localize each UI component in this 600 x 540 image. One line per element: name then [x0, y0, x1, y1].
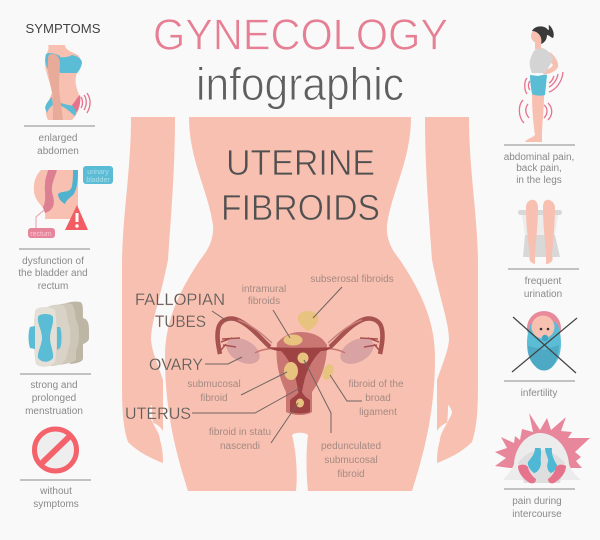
icon: prohibition sign	[34, 429, 76, 471]
label: dysfunction: rectum	[38, 281, 68, 292]
label: without symptoms: without	[39, 486, 72, 497]
subtitle: infographic: infographic	[196, 58, 404, 110]
icon: pain during intercourse	[495, 413, 590, 483]
label: without symptoms	[20, 480, 91, 510]
fibroid labels: submucosal	[187, 379, 241, 390]
label: dysfunction: the bladder and	[18, 268, 88, 279]
label: pain during intercourse	[504, 489, 575, 520]
anatomy labels: FALLOPIAN	[135, 291, 225, 309]
icon: woman with pain	[519, 25, 563, 142]
label: dysfunction: dysfunction of	[22, 256, 84, 267]
ovaries	[222, 333, 264, 369]
label: frequent urination	[508, 269, 579, 300]
anatomy labels: OVARY	[149, 356, 203, 374]
tag: rectum	[28, 228, 55, 238]
label: frequent urination: frequent	[525, 276, 562, 287]
body silhouette	[122, 117, 478, 491]
icon: enlarged abdomen	[45, 45, 90, 120]
right arm	[425, 117, 478, 463]
label: menstruation: prolonged	[32, 393, 76, 404]
label: menstruation: strong and	[30, 380, 78, 391]
fibroid labels	[187, 274, 404, 480]
fibroid labels: pedunculated	[321, 441, 381, 452]
fibroid labels: submucosal	[324, 455, 378, 466]
label: abdominal pain: abdominal pain,	[504, 152, 574, 163]
uterus diagram	[217, 311, 383, 415]
label: without symptoms: symptoms	[33, 499, 79, 510]
label: menstruation: menstruation	[25, 406, 83, 417]
anatomy labels: TUBES	[155, 313, 206, 331]
divider and label: enlarged abdomen: enlarged	[39, 133, 77, 144]
fibroid labels: fibroid in statu	[209, 427, 271, 438]
left arm	[122, 117, 175, 463]
fimbriae	[221, 338, 379, 350]
fibroid labels: nascendi	[220, 441, 260, 452]
icon: bladder and rectum: bladder	[86, 177, 110, 184]
icon: crossed-out baby	[512, 311, 577, 373]
label: abdominal pain	[504, 145, 575, 186]
fibroid labels: fibroid	[337, 469, 365, 480]
ovarian ligaments	[255, 349, 345, 353]
fibroid labels: ligament	[359, 407, 397, 418]
fibroid labels: fibroid	[200, 393, 228, 404]
label: dysfunction	[18, 249, 90, 292]
fibroid labels: intramural	[242, 284, 286, 295]
label: pain during intercourse: pain during	[512, 496, 562, 507]
torso	[165, 117, 435, 491]
warning triangle	[65, 205, 88, 230]
heading: symptoms: SYMPTOMS	[26, 21, 101, 36]
divider and label: enlarged abdomen: abdomen	[37, 146, 79, 157]
anatomy labels	[125, 291, 225, 423]
label: abdominal pain: back pain,	[516, 163, 562, 174]
label: abdominal pain: in the legs	[516, 175, 562, 186]
label: frequent urination: urination	[524, 289, 562, 300]
anatomy labels: UTERUS	[125, 405, 191, 423]
heading: uterine fibroids	[221, 142, 380, 228]
fibroid labels: broad	[365, 393, 391, 404]
label: infertility	[504, 381, 575, 399]
icon: bladder and rectum	[28, 166, 113, 238]
heading: uterine fibroids: UTERINE	[226, 142, 375, 183]
icon: bladder and rectum: urinary	[87, 169, 109, 176]
icon: sanitary pads	[28, 302, 89, 367]
fibroids	[284, 311, 336, 408]
uterus body	[276, 332, 327, 415]
fibroid labels: fibroids	[248, 296, 280, 307]
tag: urinary bladder	[83, 166, 113, 184]
fallopian tubes	[217, 319, 383, 354]
label: pain during intercourse: intercourse	[512, 509, 562, 520]
fibroid labels: fibroid of the	[348, 379, 404, 390]
gap between the legs	[292, 433, 308, 491]
dark band and cavity	[268, 347, 332, 396]
icon: toilet and legs	[518, 200, 562, 264]
label: infertility: infertility	[521, 388, 557, 399]
title: gynecology: GYNECOLOGY	[153, 10, 448, 60]
icon: bladder and rectum: rectum	[30, 231, 52, 238]
heading: uterine fibroids: FIBROIDS	[221, 187, 380, 228]
label: menstruation	[20, 374, 91, 417]
fibroid labels: subserosal fibroids	[310, 274, 394, 285]
divider and label: enlarged abdomen	[24, 126, 95, 157]
leader lines	[192, 287, 362, 443]
